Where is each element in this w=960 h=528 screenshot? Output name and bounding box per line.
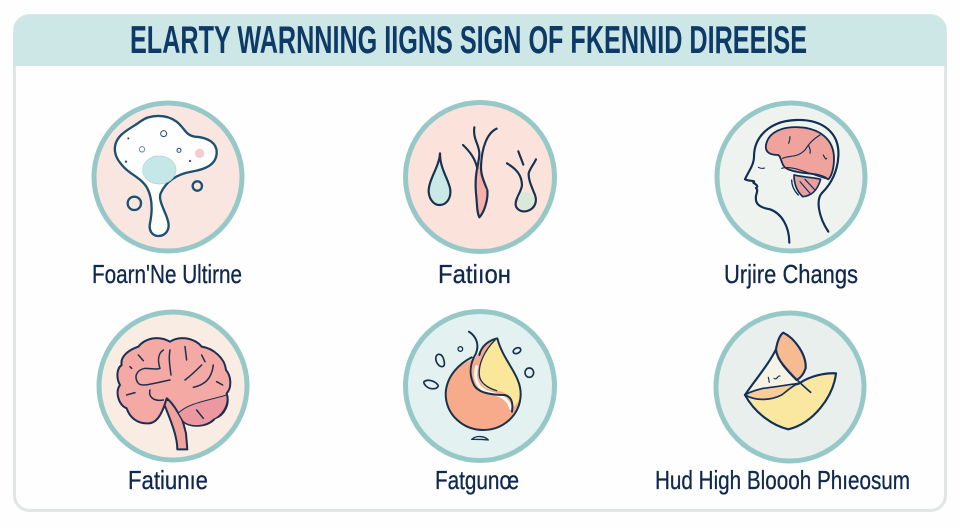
panel: high blood pressure <box>655 313 910 495</box>
label: Fatgunœ <box>435 465 519 495</box>
icon circle <box>406 312 554 460</box>
panel: fatigue top middle <box>406 102 554 289</box>
panel: foamy urine <box>92 103 242 289</box>
icon circle <box>717 103 865 251</box>
icon: head with brain <box>745 120 838 243</box>
icon: droplet flame <box>424 332 534 440</box>
icon circle <box>406 102 554 252</box>
label: Fatiıoн <box>438 259 511 289</box>
icon: foam drop <box>115 116 217 236</box>
header band <box>14 15 946 66</box>
label: Fatiunıe <box>128 465 208 495</box>
icon circle <box>94 103 242 251</box>
icon circle <box>716 313 864 461</box>
icon circle <box>99 312 247 460</box>
label: Urjire Changs <box>724 259 858 289</box>
panel: urine changes <box>717 103 865 289</box>
icon: brain <box>117 338 230 449</box>
panel: fatigue flame <box>406 312 554 495</box>
icon: folded leaf bowl <box>745 333 836 429</box>
panel: fatigue brain <box>99 312 247 495</box>
label: Foarn'Ne Ultirne <box>92 259 242 289</box>
icon: drops and strands <box>429 127 536 217</box>
